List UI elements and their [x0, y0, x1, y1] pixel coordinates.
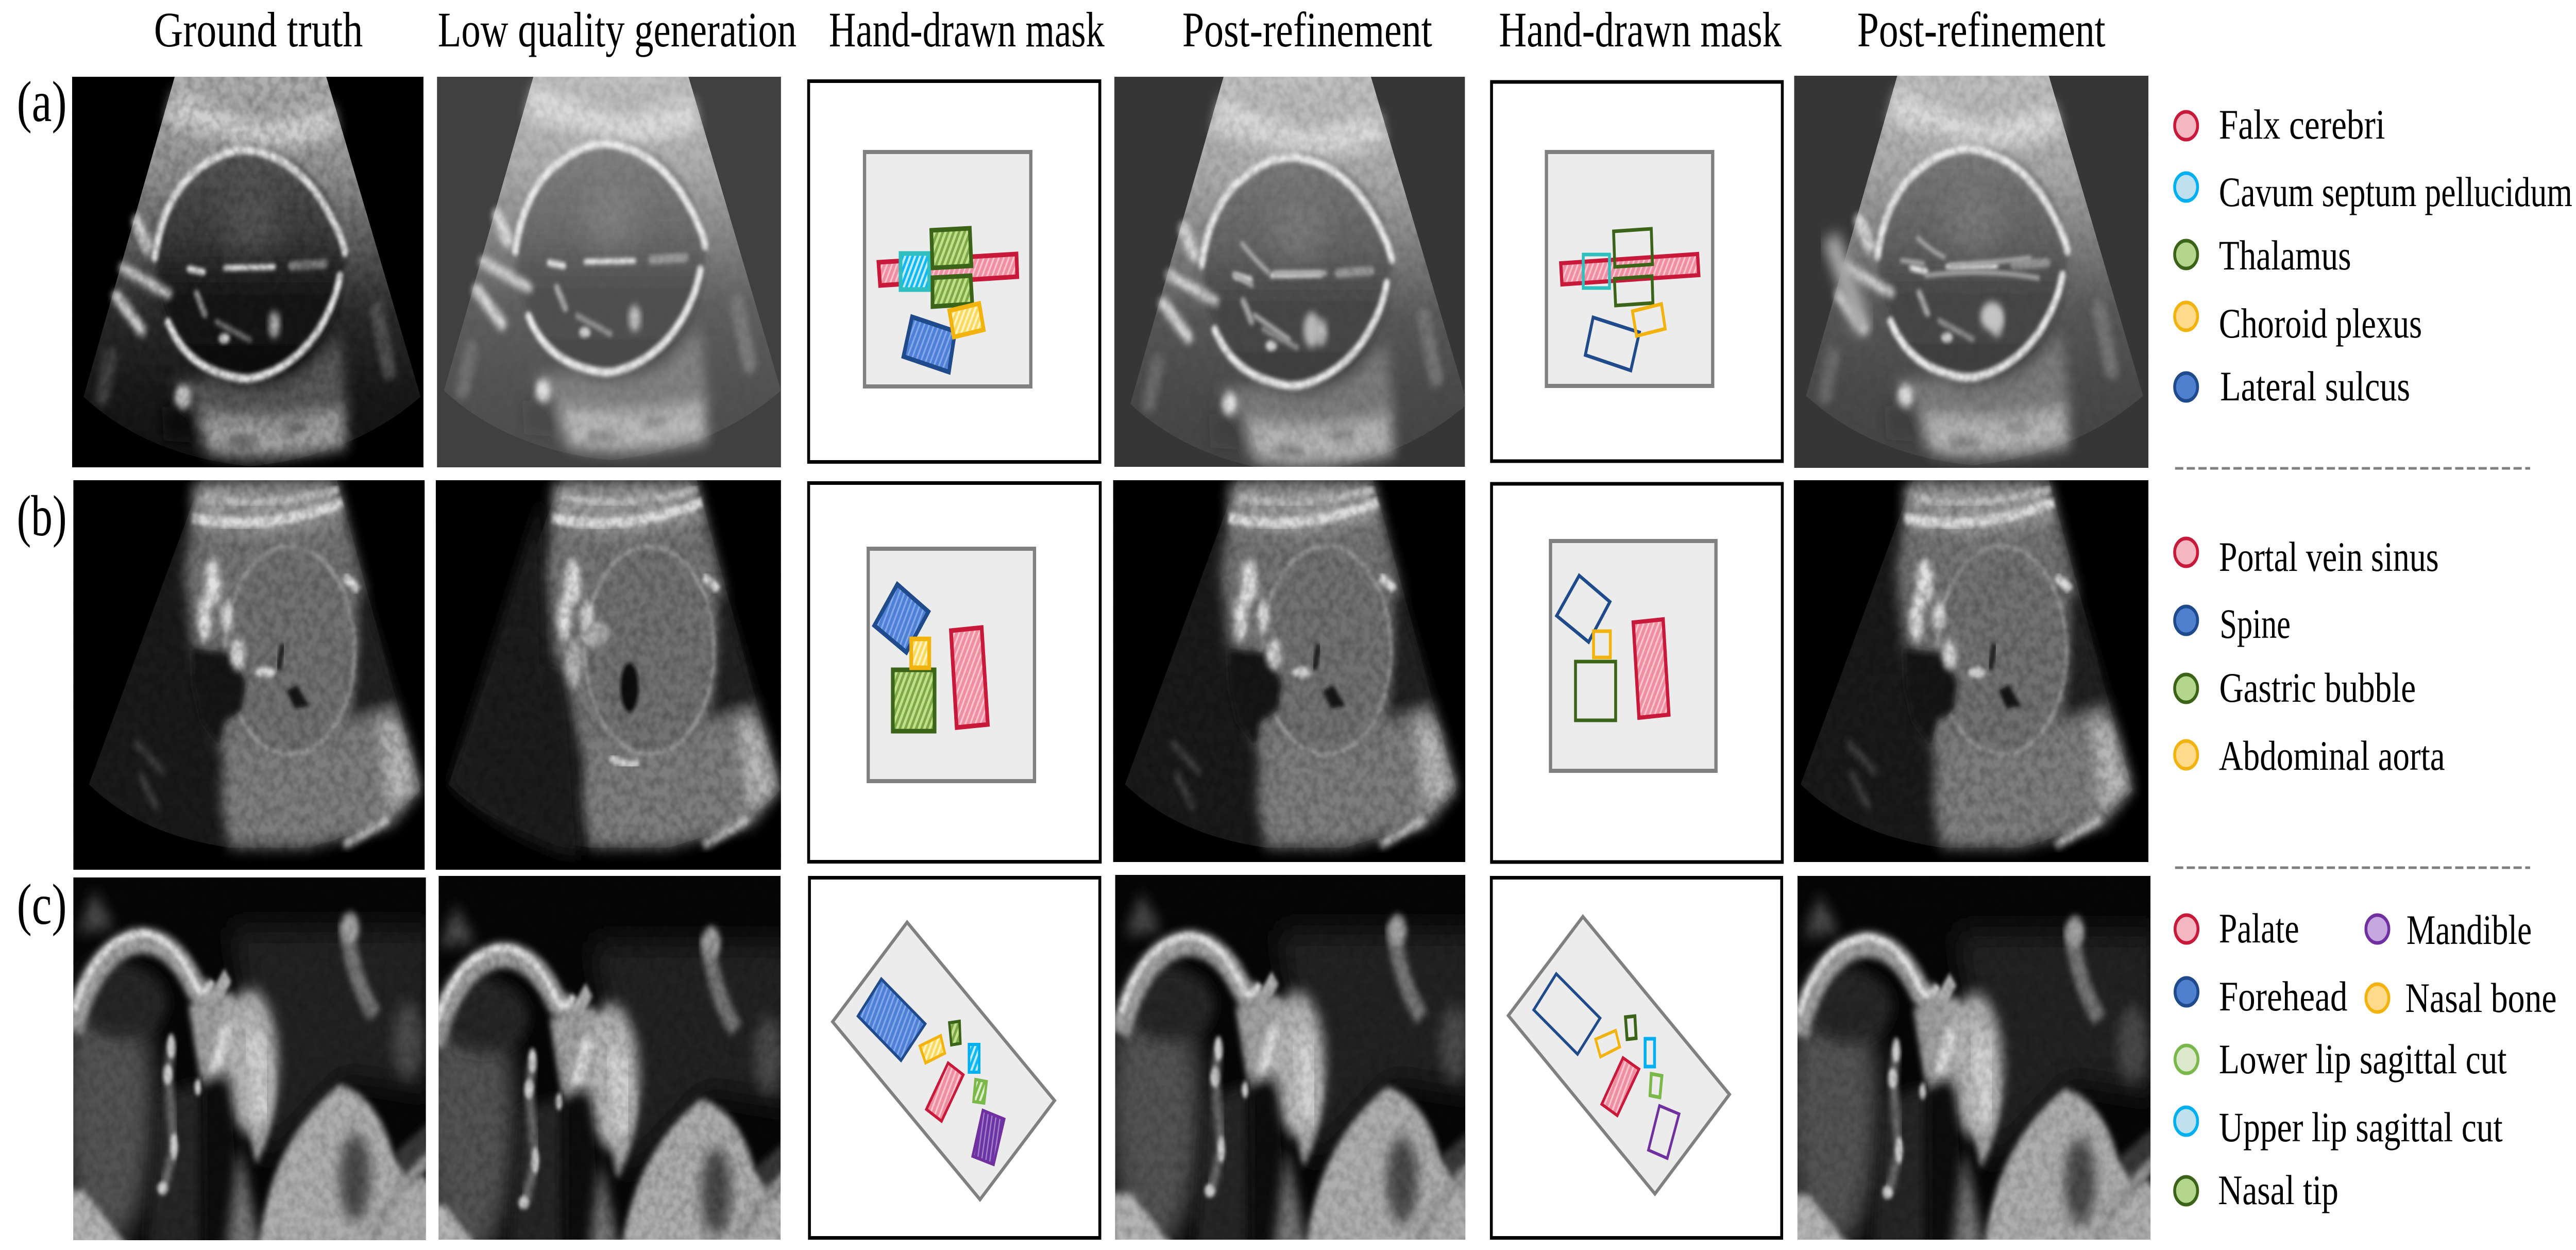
legend: row c structures [2175, 905, 2557, 1214]
mask panel: row a second mask [1492, 82, 1782, 461]
legend item: portal vein sinus: Portal vein sinus [2219, 534, 2439, 581]
mask panel: row a first mask [809, 81, 1100, 462]
legend item: mandible: Mandible [2406, 907, 2532, 954]
lateral sulcus outline [1585, 317, 1639, 370]
falx cerebri box [878, 254, 1018, 285]
legend item: lateral sulcus: Lateral sulcus [2220, 363, 2410, 410]
legend item: lower lip sagittal cut: Lower lip sagittal cut [2219, 1036, 2507, 1083]
image: head ultrasound post-refinement mask 2 [1794, 61, 2148, 468]
legend item: palate: Palate [2219, 905, 2299, 952]
image: head ultrasound low quality [437, 56, 781, 467]
gastric bubble box [893, 670, 935, 731]
legend item: forehead: Forehead [2219, 973, 2347, 1020]
portal vein sinus box [1633, 619, 1669, 718]
mask panel: row c second mask [1492, 878, 1782, 1238]
choroid plexus outline [1633, 304, 1665, 336]
nasal bone box [920, 1036, 945, 1063]
spine box [874, 584, 928, 652]
portal vein sinus box [951, 628, 988, 728]
palate box [1602, 1058, 1639, 1116]
nasal tip box [950, 1021, 960, 1045]
thalamus box lower [933, 276, 972, 307]
abdominal aorta box [911, 639, 929, 668]
row label (a): (a) [17, 70, 67, 133]
column heading: Post-refinement: Post-refinement [1182, 3, 1432, 57]
legend item: cavum septum pellucidum: Cavum septum pellucidum [2219, 169, 2572, 216]
image: abdomen ultrasound post-refinement mask 1 [1113, 480, 1465, 862]
column heading: Post-refinement second: Post-refinement [1857, 3, 2106, 57]
column heading: Hand-drawn mask: Hand-drawn mask [829, 3, 1105, 57]
abdominal aorta outline [1594, 631, 1611, 657]
image: face ultrasound ground truth [63, 877, 434, 1250]
nasal tip outline [1625, 1016, 1636, 1039]
legend item: gastric bubble: Gastric bubble [2219, 665, 2416, 712]
lower lip outline [1650, 1074, 1662, 1097]
image: head ultrasound ground truth [72, 62, 423, 467]
forehead box [858, 979, 925, 1060]
forehead outline [1534, 974, 1600, 1054]
nasal bone outline [1596, 1031, 1620, 1057]
legend item: nasal tip: Nasal tip [2218, 1167, 2338, 1214]
thalamus box upper [931, 228, 972, 268]
image: face ultrasound post-refinement mask 2 [1788, 876, 2159, 1250]
row label (c): (c) [17, 872, 67, 936]
legend item: abdominal aorta: Abdominal aorta [2219, 733, 2445, 780]
row label (b): (b) [17, 484, 67, 548]
lateral sulcus box [904, 317, 955, 372]
cavum septum pellucidum box [901, 254, 929, 290]
upper lip box [969, 1044, 979, 1072]
mask panel: row c first mask [809, 878, 1100, 1238]
palate box [926, 1063, 963, 1121]
mask panel: row b first mask [809, 483, 1100, 862]
legend: row a structures [2175, 102, 2572, 410]
spine outline [1556, 576, 1610, 642]
lower lip box [974, 1079, 987, 1103]
legend item: spine [2175, 601, 2291, 648]
mandible box [973, 1110, 1004, 1164]
thalamus box upper outline [1614, 229, 1652, 267]
legend item: thalamus: Thalamus [2219, 232, 2351, 279]
column heading: Hand-drawn mask second: Hand-drawn mask [1499, 3, 1782, 57]
legend item: choroid plexus: Choroid plexus [2219, 300, 2422, 347]
falx cerebri box [1561, 254, 1699, 284]
mask panel: row b second mask [1492, 484, 1782, 862]
thalamus box lower outline [1615, 276, 1653, 306]
column heading: Low quality generation: Low quality generation [438, 3, 796, 57]
legend: row b structures [2175, 534, 2445, 780]
mandible outline [1649, 1106, 1679, 1158]
legend item: palate [2175, 905, 2299, 952]
image: abdomen ultrasound low quality [436, 480, 781, 870]
image: abdomen ultrasound post-refinement mask 2 [1794, 480, 2148, 862]
legend item: upper lip sagittal cut: Upper lip sagittal cut [2219, 1104, 2503, 1151]
legend item: nasal bone: Nasal bone [2405, 975, 2557, 1022]
image: face ultrasound post-refinement mask 1 [1110, 875, 1481, 1250]
image: head ultrasound post-refinement mask 1 [1114, 69, 1467, 474]
gastric bubble outline [1575, 662, 1616, 720]
cavum septum pellucidum outline [1583, 255, 1609, 288]
image: abdomen ultrasound ground truth [73, 480, 425, 870]
legend item: spine: Spine [2219, 601, 2291, 648]
legend item: falx cerebri: Falx cerebri [2219, 102, 2385, 148]
column heading: Ground truth: Ground truth [154, 3, 363, 57]
choroid plexus box [950, 303, 984, 337]
upper lip outline [1645, 1039, 1654, 1067]
image: face ultrasound low quality [424, 876, 795, 1250]
